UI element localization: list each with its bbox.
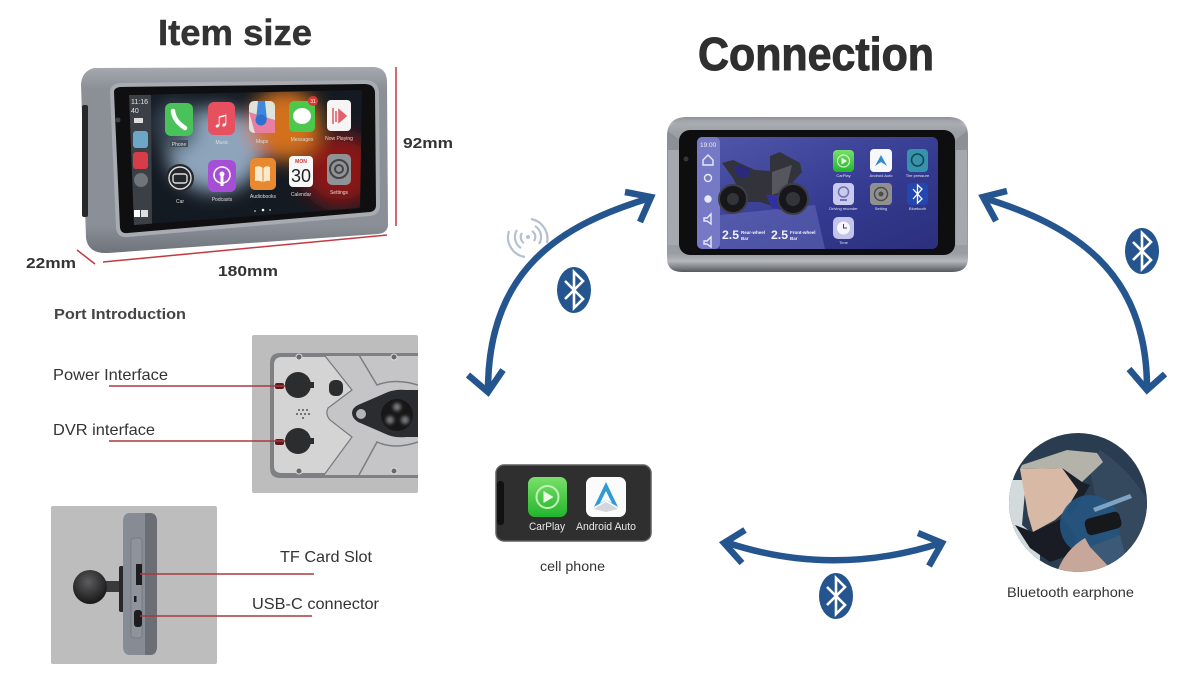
app: CarPlay: CarPlay [836,173,851,178]
app: Calendar: Calendar [291,192,311,198]
app: Maps [249,101,275,145]
label: USB-C connector: USB-C connector [252,596,380,613]
home screen wallpaper [129,90,362,225]
label: TF Card Slot: TF Card Slot [280,549,373,566]
app: Bluetooth [907,183,928,211]
icon: wireless signal [508,219,547,257]
app: Phone: Phone [172,142,186,148]
app: Podcasts: Podcasts [212,197,233,203]
app: CarPlay [528,477,567,533]
app dock: 11:16 [131,99,148,106]
sidebar icons [703,155,713,247]
USB-C port [134,610,142,627]
app: Podcasts [208,160,236,203]
screen [697,137,938,249]
app: Phone [165,103,193,148]
tire pressure readout: Bar [790,236,798,241]
label: DVR interface: DVR interface [53,422,155,439]
app: Car: Car [176,199,184,205]
heading: Port Introduction: Port Introduction [54,306,186,323]
app: Messages [289,96,318,143]
tire pressure readout: Bar [741,236,749,241]
photo: rider with helmet and Bluetooth earphone [1008,433,1148,575]
app: Time: Time [839,240,849,245]
app: Now Playing [325,100,353,142]
leader line: USB-C [140,615,312,617]
app: Calendar: MON [295,159,307,165]
app: Music: ♫ [213,107,229,132]
tire pressure readout [722,228,816,242]
app: Settings: Settings [330,190,349,196]
dimension lines [77,67,396,264]
app: Time [833,217,854,245]
dimension: 22mm: 22mm [26,255,76,272]
app: Driving recorder [829,183,858,211]
icon: Bluetooth badge right [1125,228,1159,274]
app: Audiobooks: Audiobooks [250,194,277,200]
tire pressure readout: Front-wheel [790,230,816,235]
app: Calendar: 30 [291,166,311,186]
app: Car [166,164,194,205]
app: Bluetooth: Bluetooth [909,206,926,211]
app: Tire pressure: Tire pressure [906,173,930,178]
app: Driving recorder: Driving recorder [829,206,858,211]
screen: 19:00 [700,142,717,149]
product photo: central device with motorcycle screen [667,117,968,272]
label: cell phone: cell phone [540,558,605,574]
dimension: 92mm: 92mm [403,135,453,152]
app: Android Auto [576,477,636,533]
port: power [275,372,314,398]
port: DVR [275,428,314,454]
app: Android Auto: Android Auto [870,173,893,178]
screws [296,354,397,474]
app: Audiobooks [250,158,277,200]
app: Messages: Messages [291,137,314,143]
app: CarPlay [833,150,854,178]
leader line: DVR [109,440,285,442]
leader line: power [109,385,285,387]
tire pressure readout: 2.5 [771,228,788,242]
product photo: device with CarPlay home screen [81,67,388,253]
app: Messages: 31 [310,99,316,105]
app: Android Auto: Android Auto [576,521,636,533]
arrow: device to cell phone [468,192,651,392]
app: CarPlay: CarPlay [529,521,565,533]
app: Settings [327,154,351,196]
speaker grille [296,409,310,419]
dimension: 180mm: 180mm [218,263,278,280]
title: Connection: Connection [698,28,934,80]
app: Calendar [289,156,313,198]
label: Power Interface: Power Interface [53,367,168,384]
device side view [123,513,157,655]
panel: side ports photo [51,506,217,664]
arrow: device to earphone [983,191,1165,390]
app dock [131,99,148,217]
app: Setting: Setting [875,206,887,211]
app: Android Auto [870,149,893,178]
icon: Bluetooth badge bottom [819,573,853,619]
app: Tire pressure [906,149,930,178]
app: Now Playing: Now Playing [325,136,353,142]
camera lens [329,380,343,396]
icon: Bluetooth badge left [557,267,591,313]
leader line: TF card [140,573,314,575]
app dock: 40 [131,108,139,115]
cell phone [496,465,651,541]
label: Bluetooth earphone: Bluetooth earphone [1007,584,1134,600]
arrow: cell phone to earphone [724,530,942,566]
title: Item size: Item size [158,12,312,53]
app: Maps: Maps [256,139,269,145]
tire pressure readout: 2.5 [722,228,739,242]
panel: rear ports photo [252,335,418,493]
tire pressure readout: Rear-wheel [741,230,765,235]
app: Music: Music [215,140,229,146]
app: Setting [870,183,892,211]
TF card slot [136,564,142,585]
mount diamond and ball [352,390,418,437]
app: Music [208,102,235,146]
ball mount [73,566,124,612]
motorcycle [719,152,808,214]
